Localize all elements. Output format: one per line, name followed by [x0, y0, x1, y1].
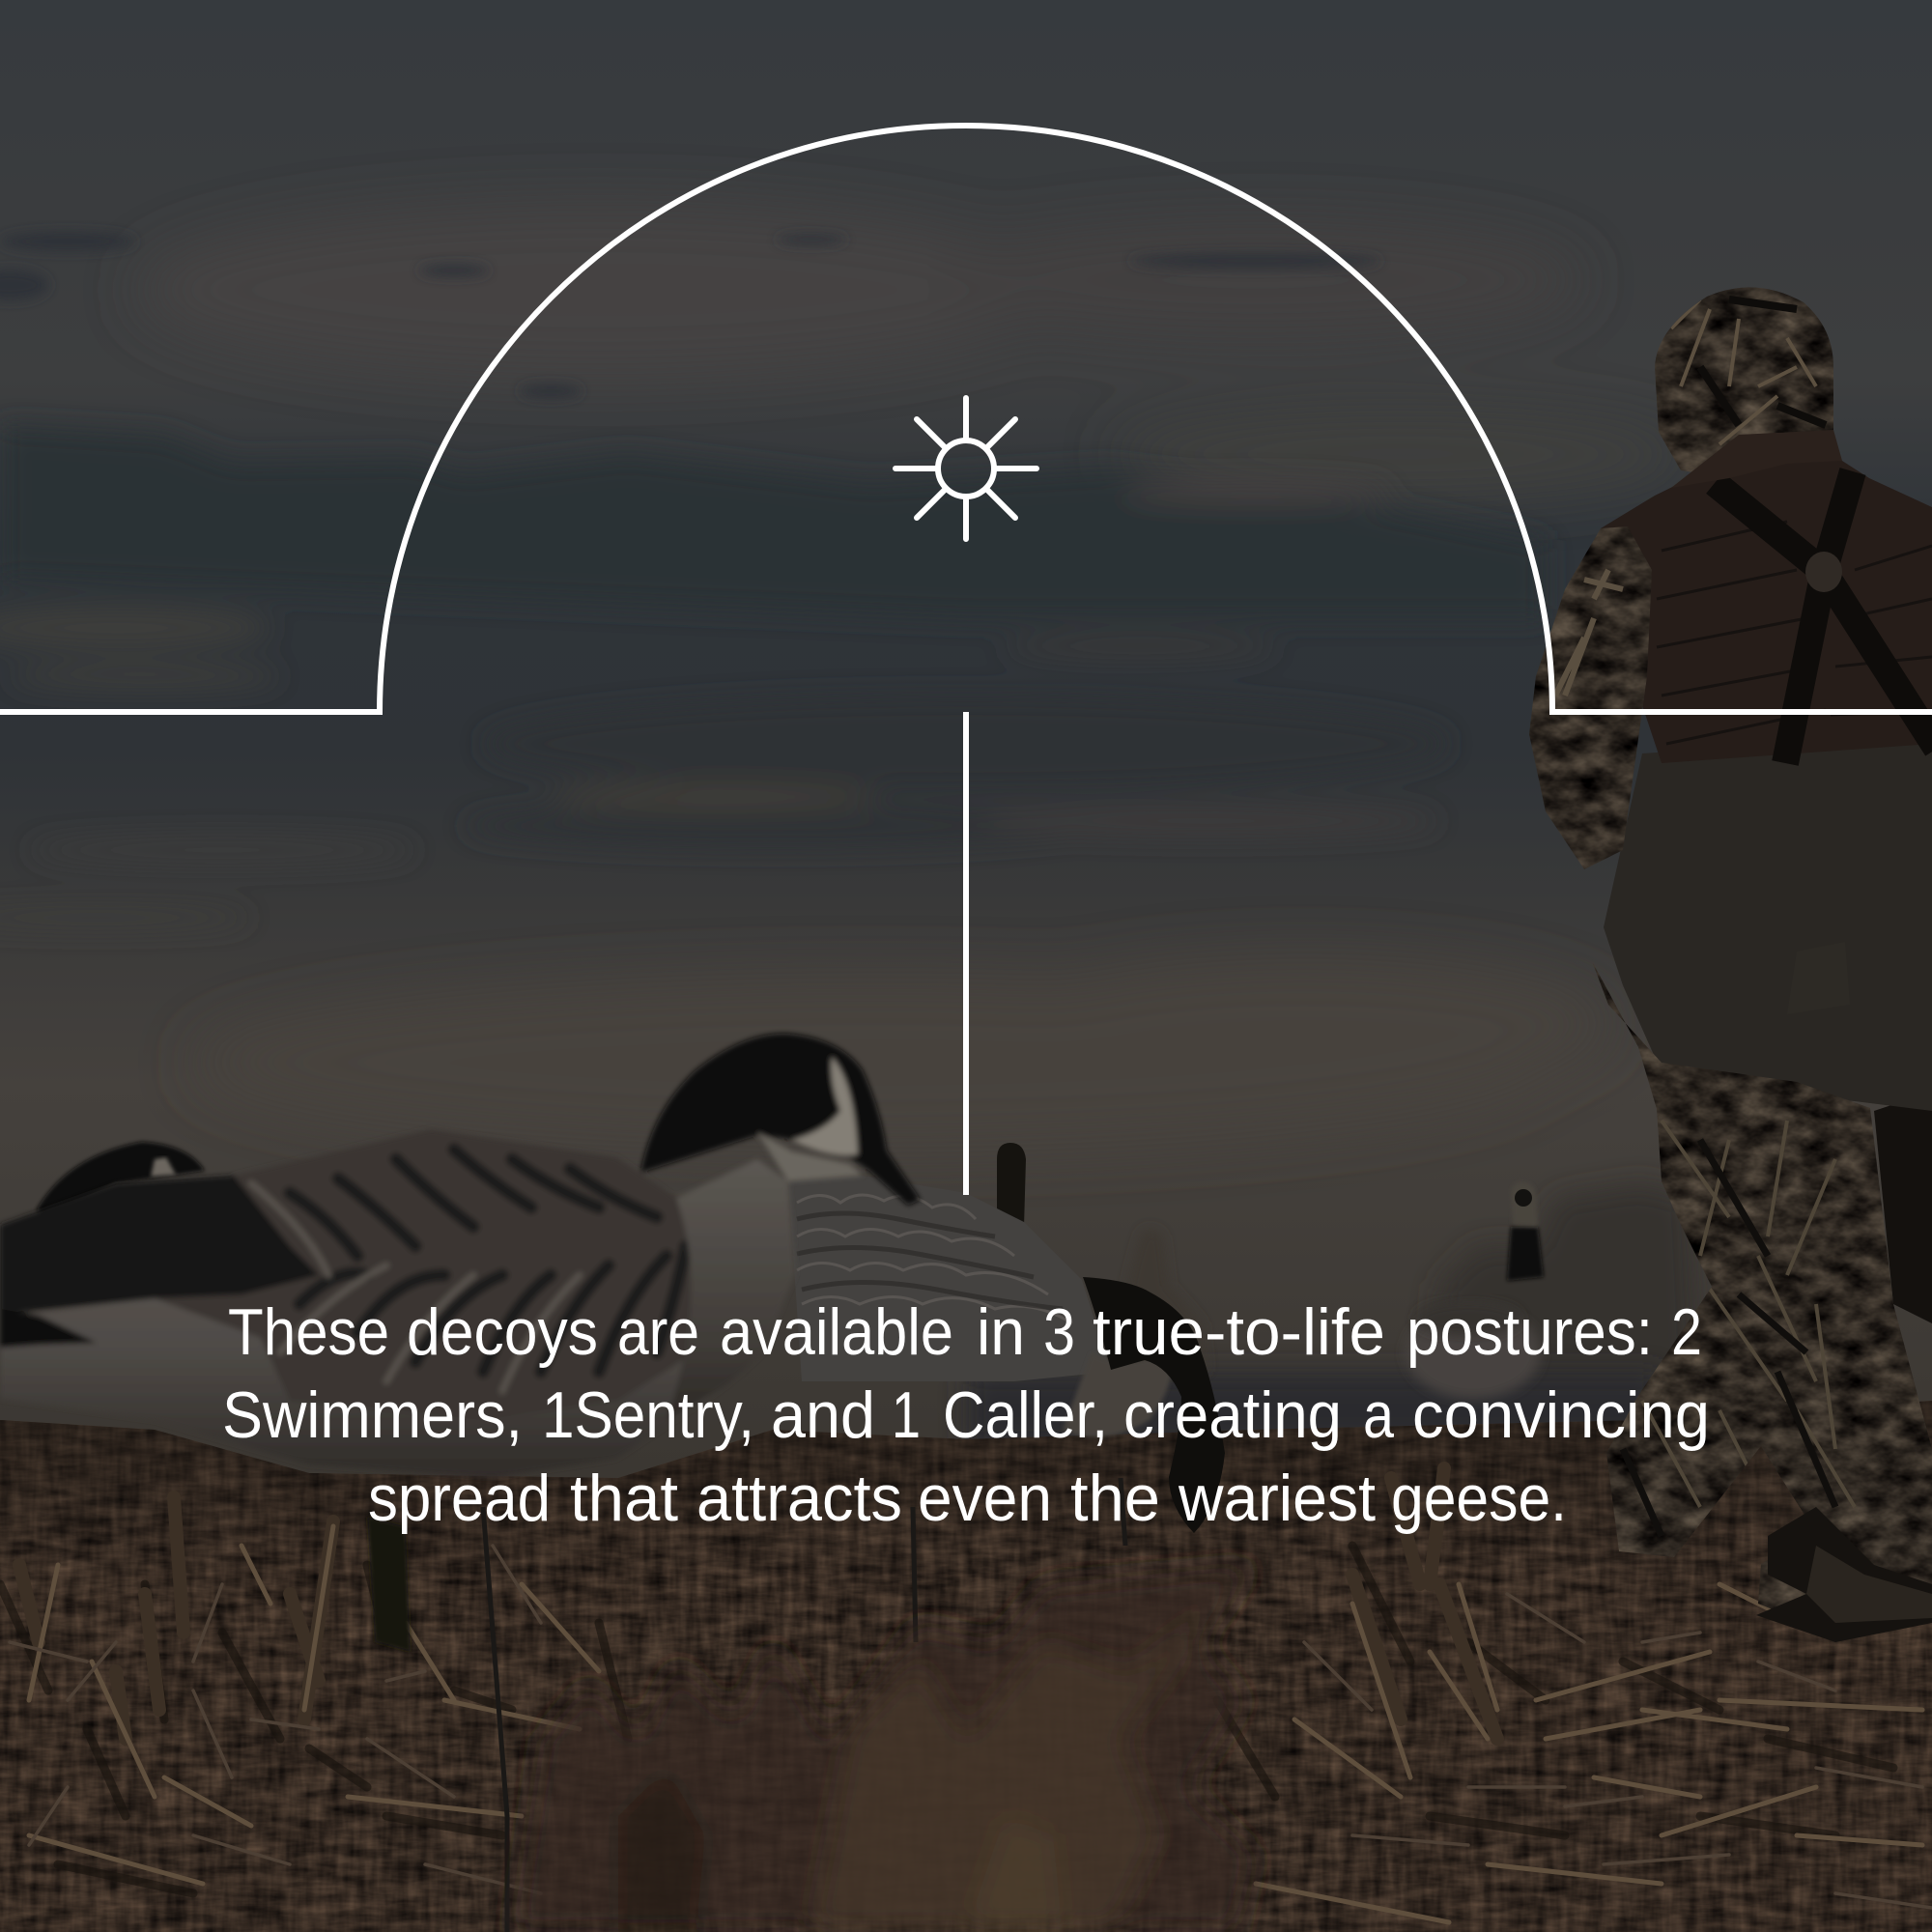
- sentry decoy neck: [997, 1143, 1026, 1227]
- back leg shadow: [1874, 1092, 1932, 1323]
- white belly: [0, 1181, 795, 1478]
- suspenders: [1715, 471, 1932, 763]
- icon: sun: [895, 398, 1037, 539]
- caption text: spread: [368, 1462, 551, 1535]
- camo hood: [1655, 288, 1833, 471]
- caption text: 3: [1043, 1295, 1075, 1369]
- distant treeline and decoys: [966, 1143, 1700, 1449]
- blurred foreground clumps: [512, 1565, 1256, 1932]
- caption text: the: [1070, 1462, 1160, 1535]
- caption text: Swimmers,: [222, 1378, 523, 1452]
- caption text: available: [720, 1295, 953, 1369]
- white breast: [667, 1159, 795, 1420]
- camo legs: [1584, 956, 1932, 1642]
- caption text: are: [617, 1295, 699, 1369]
- sky with clouds: [0, 0, 1932, 1507]
- caption text: in: [977, 1295, 1025, 1369]
- dark tail and wing: [0, 1129, 705, 1420]
- dark stalk shadows: [0, 1546, 1893, 1893]
- caption text: 1Sentry,: [542, 1378, 754, 1452]
- white flank: [1063, 1352, 1171, 1437]
- grazing decoy behind: [788, 1176, 1225, 1533]
- caption text: Caller,: [943, 1378, 1108, 1452]
- boot: [1756, 1507, 1932, 1642]
- corn stubble field: [0, 1391, 1932, 1932]
- caption text: wariest: [1178, 1462, 1376, 1535]
- caption text: creating: [1123, 1378, 1342, 1452]
- suspender clasp: [1805, 552, 1842, 592]
- collar: [1671, 430, 1842, 488]
- foreground grazing goose: [0, 1034, 921, 1478]
- caption text: that: [570, 1462, 678, 1535]
- caption text: true-to-life: [1093, 1295, 1385, 1369]
- caller decoy: [1406, 1182, 1544, 1399]
- pants: [1604, 734, 1932, 1111]
- bright straw pieces: [29, 1526, 1922, 1922]
- caption text: postures:: [1406, 1295, 1653, 1369]
- caption text: decoys: [407, 1295, 598, 1369]
- white chin collar: [757, 1132, 863, 1181]
- caption text: a: [1363, 1378, 1394, 1452]
- arch line with horizontal arms: [0, 126, 1932, 712]
- decoy stakes: [483, 1478, 1125, 1932]
- caption text: 2: [1671, 1295, 1702, 1369]
- white cheek patch: [792, 1057, 858, 1155]
- caption text: even: [918, 1462, 1052, 1535]
- feathered body: [788, 1176, 1111, 1381]
- caption text: [222, 1295, 1710, 1535]
- caption text: 1: [892, 1378, 921, 1452]
- feather stripes: [290, 1150, 686, 1372]
- rear goose decoy: black neck and head: [37, 1142, 205, 1219]
- caption text: These: [228, 1295, 389, 1369]
- quilted vest: [1601, 454, 1932, 763]
- caption text: attracts: [696, 1462, 902, 1535]
- camo sleeve: [1529, 527, 1652, 869]
- upright stubs: [19, 1468, 1497, 1739]
- caption text: convincing: [1412, 1378, 1710, 1452]
- vertical connector line: [963, 712, 969, 1195]
- caption text: and: [771, 1378, 875, 1452]
- hunter figure: [1526, 280, 1932, 1642]
- caption text: geese.: [1391, 1462, 1567, 1535]
- black head and neck: [640, 1034, 921, 1206]
- black neck curving down: [1083, 1277, 1225, 1533]
- thin mid-tone straw: [10, 1546, 1932, 1908]
